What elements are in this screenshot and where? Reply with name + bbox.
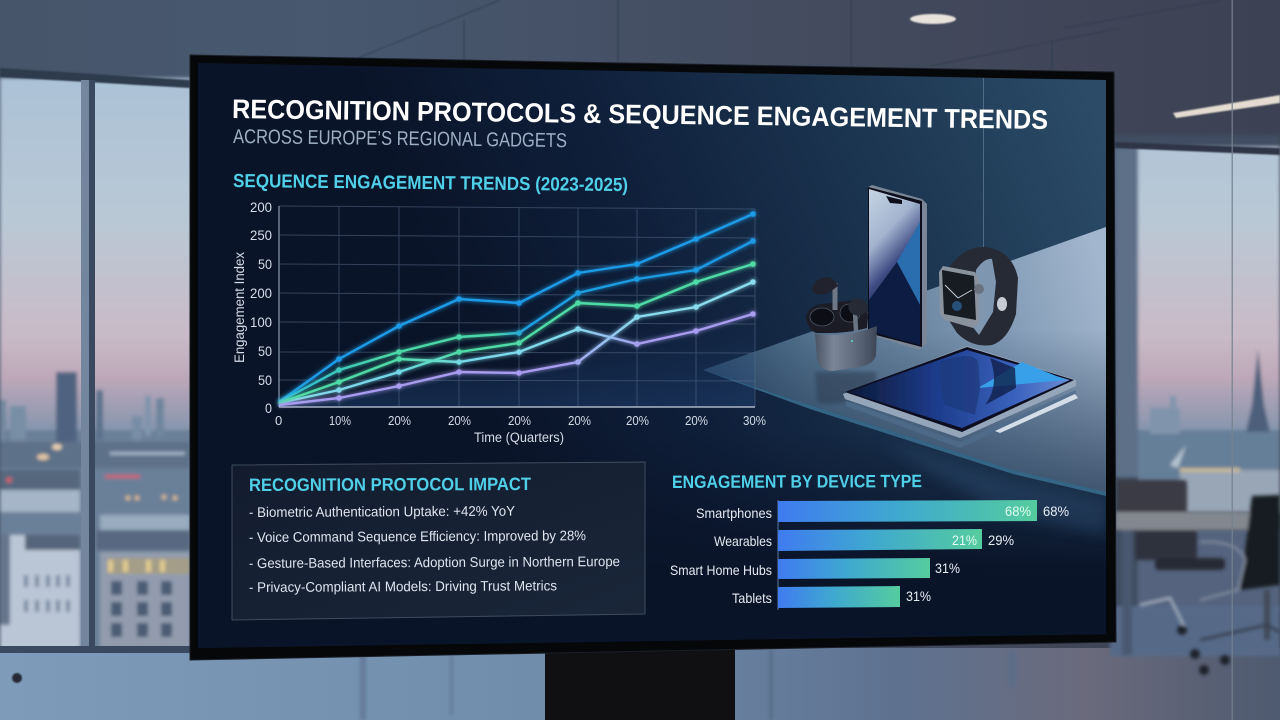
floor xyxy=(0,648,1280,720)
monitor screen xyxy=(198,60,1108,650)
series 5 xyxy=(279,279,756,405)
subtitle: ACROSS EUROPE’S REGIONAL GADGETS xyxy=(233,126,567,152)
ceiling lines xyxy=(358,0,1222,70)
x axis labels: 10% xyxy=(329,413,351,428)
x axis title: Time (Quarters) xyxy=(474,430,564,445)
y axis labels: 50 xyxy=(258,372,272,388)
icon: smartphone xyxy=(868,185,927,350)
bar: smartphones: 68% xyxy=(1043,503,1069,519)
chart grid xyxy=(279,206,755,407)
product display: glass surface xyxy=(703,227,1106,535)
bar: wearables: Wearables xyxy=(714,533,772,549)
monitor bezel xyxy=(190,55,1116,660)
bullet list: - Biometric Authentication Uptake: +42% YoY xyxy=(249,503,516,520)
bullet list: - Gesture-Based Interfaces: Adoption Surge in Northern Europe xyxy=(249,553,620,571)
glass reflection line xyxy=(983,78,984,253)
conference furniture xyxy=(1115,480,1280,675)
y axis labels: 0 xyxy=(265,400,272,416)
y axis labels: 250 xyxy=(250,227,272,243)
x axis labels: 20% xyxy=(448,413,471,428)
y axis labels: 200 xyxy=(250,199,272,215)
bar: wearables: 21% xyxy=(952,532,977,548)
bar: smartphones: Smartphones xyxy=(696,505,772,521)
main title: RECOGNITION PROTOCOLS & SEQUENCE ENGAGEMENT TRENDS xyxy=(232,94,1048,135)
y axis labels: 100 xyxy=(250,314,272,330)
heading: sequence engagement trends: SEQUENCE ENGAGEMENT TRENDS (2023-2025) xyxy=(233,171,628,196)
right window xyxy=(1110,135,1280,610)
bar: tablets: 31% xyxy=(906,588,931,604)
monitor stand xyxy=(545,648,735,720)
x axis labels: 20% xyxy=(685,413,708,428)
x axis labels: 0 xyxy=(275,413,282,428)
bar: smart home hubs: Smart Home Hubs xyxy=(670,562,772,578)
glass divider xyxy=(1232,0,1233,720)
bullet list: - Privacy-Compliant AI Models: Driving Trust Metrics xyxy=(249,577,557,595)
icon: earbuds and case xyxy=(806,277,877,404)
panel: recognition protocol impact xyxy=(232,462,645,620)
floor right xyxy=(1110,606,1280,656)
x axis labels: 30% xyxy=(743,413,766,428)
bar: smartphones xyxy=(696,500,1069,522)
series 1 xyxy=(279,211,756,402)
bar: tablets: Tablets xyxy=(732,590,772,606)
ceiling lights xyxy=(910,14,956,24)
bar: smart home hubs: 31% xyxy=(935,560,960,576)
bar: wearables xyxy=(714,529,1014,551)
line chart xyxy=(232,199,766,445)
y axis labels: 200 xyxy=(250,285,272,301)
y axis labels: 50 xyxy=(258,343,272,359)
floor reflections xyxy=(360,650,1016,720)
y axis title: Engagement Index xyxy=(232,252,247,363)
left window frames xyxy=(0,68,190,88)
x axis labels: 20% xyxy=(626,413,649,428)
panel heading: RECOGNITION PROTOCOL IMPACT xyxy=(249,474,531,495)
bar: tablets xyxy=(732,586,931,608)
series 3 xyxy=(279,261,756,403)
bar chart xyxy=(670,500,1069,610)
series 2 xyxy=(279,238,756,402)
bar: smart home hubs xyxy=(670,558,960,579)
x axis labels: 20% xyxy=(568,413,591,428)
series 4 xyxy=(279,311,756,403)
left window xyxy=(0,78,192,650)
y axis labels xyxy=(250,199,272,416)
bullet list xyxy=(249,503,620,595)
heading: engagement by device type: ENGAGEMENT BY DEVICE TYPE xyxy=(672,471,922,492)
bullet list: - Voice Command Sequence Efficiency: Improved by 28% xyxy=(249,527,586,545)
bar: wearables: 29% xyxy=(988,532,1014,548)
x axis labels: 20% xyxy=(388,413,411,428)
x axis labels xyxy=(276,416,766,425)
bar: smartphones: 68% xyxy=(1005,503,1031,519)
x axis labels: 20% xyxy=(508,413,531,428)
icon: smartwatch xyxy=(939,247,1018,346)
icon: stylus xyxy=(995,394,1078,433)
y axis labels: 50 xyxy=(258,256,272,272)
icon: tablet xyxy=(843,346,1076,448)
